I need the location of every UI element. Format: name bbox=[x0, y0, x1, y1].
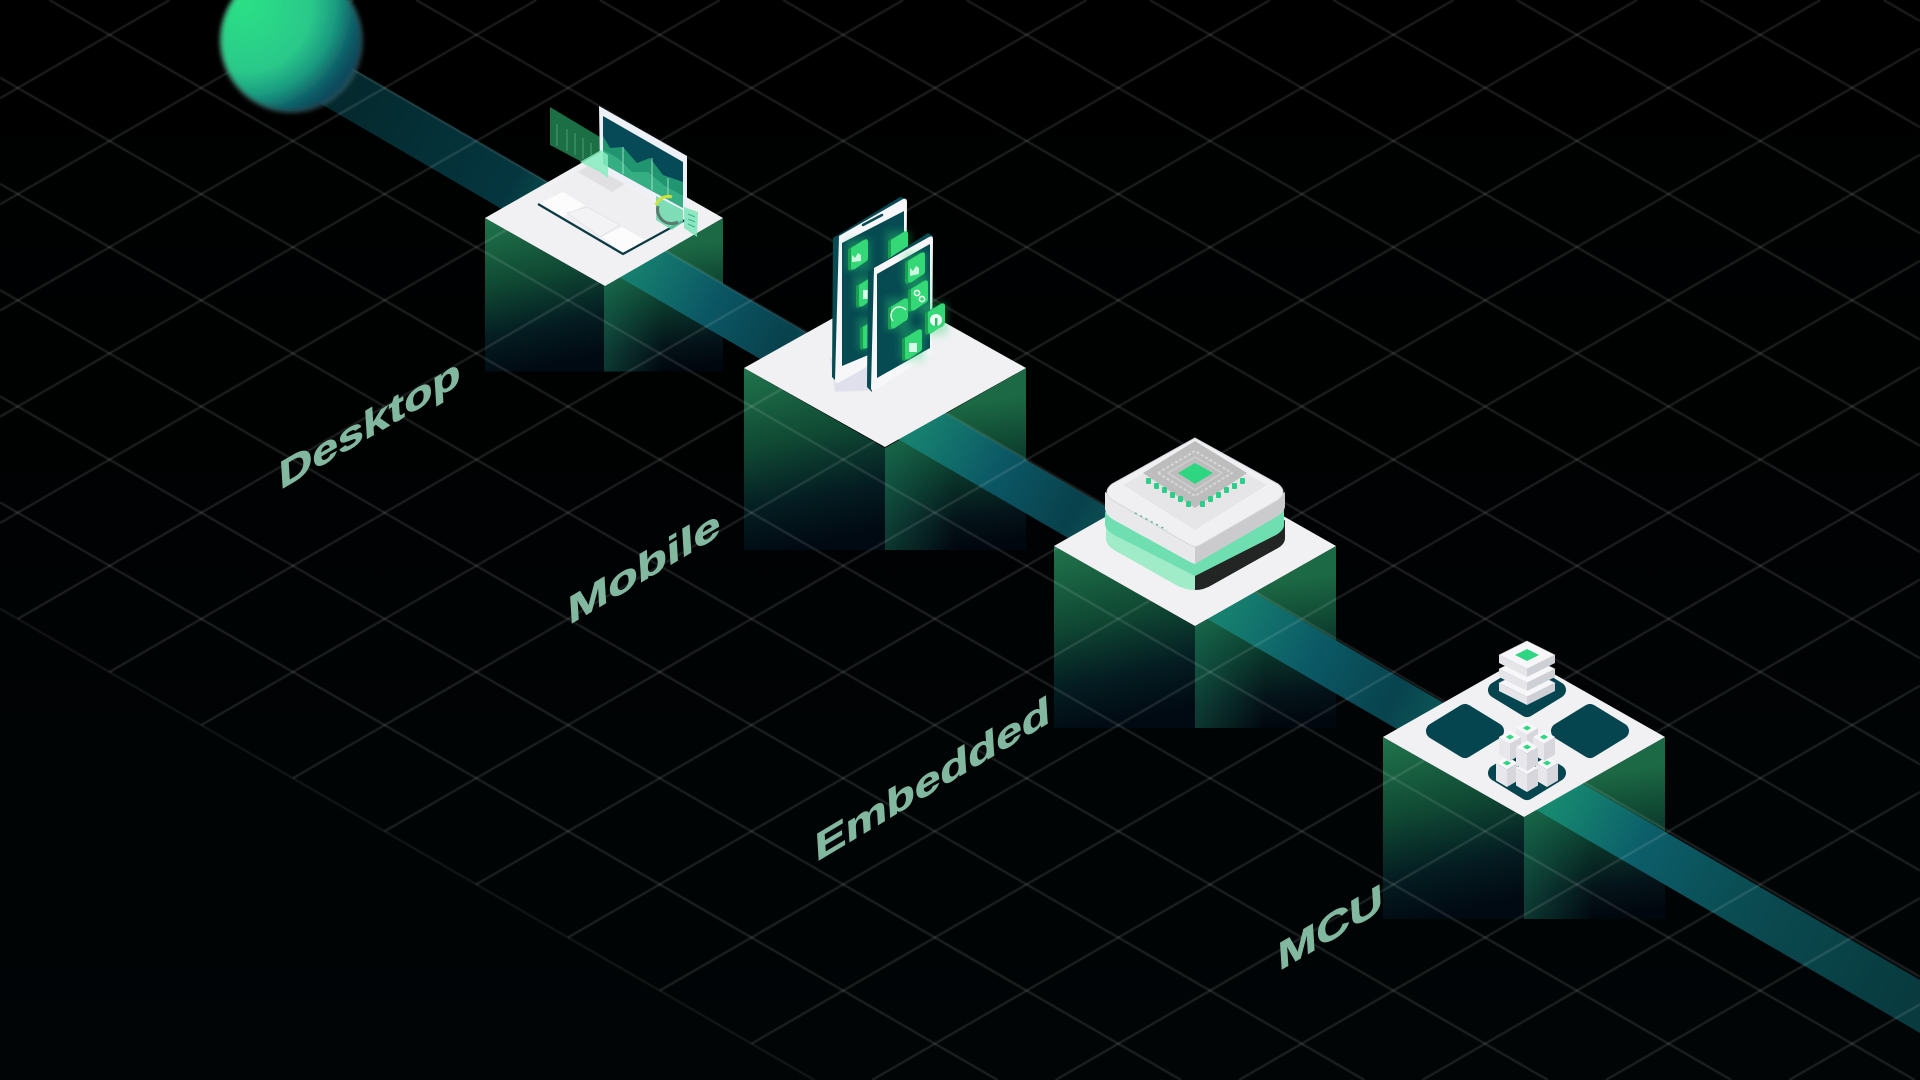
front phone bbox=[867, 233, 947, 392]
platform top bbox=[485, 150, 723, 286]
cube body: Embedded bbox=[1054, 546, 1336, 728]
icon: gauge widget bbox=[656, 196, 698, 237]
icon: chip housing bbox=[1105, 438, 1285, 564]
icon: chip base layers bbox=[1105, 508, 1285, 590]
platform top bbox=[744, 289, 1026, 447]
app icon tiles on back phone bbox=[846, 231, 910, 350]
icon: cube cluster bbox=[1496, 722, 1558, 792]
panel: Embedded platform with chip bbox=[1054, 438, 1336, 626]
label: Desktop: Desktop bbox=[278, 349, 462, 498]
label: Mobile: Mobile bbox=[567, 501, 722, 634]
app icon tiles on front phone bbox=[886, 252, 947, 361]
rounded teal slots bbox=[1434, 671, 1621, 792]
label: Embedded: Embedded bbox=[814, 687, 1051, 870]
panel: Mobile platform with phones bbox=[744, 197, 1026, 447]
sphere bbox=[219, 0, 363, 113]
label: MCU: MCU bbox=[1277, 875, 1384, 979]
panel: Desktop platform with laptop bbox=[485, 106, 723, 286]
panel: MCU platform with blocks bbox=[1383, 641, 1665, 817]
cube body: MCU bbox=[1383, 737, 1665, 919]
cube body: Desktop bbox=[485, 218, 723, 372]
chip pins bbox=[1146, 478, 1245, 507]
platform top bbox=[1383, 657, 1665, 817]
cube body: Mobile bbox=[744, 368, 1026, 550]
back phone bbox=[832, 197, 910, 383]
icon: laptop base bbox=[538, 164, 685, 254]
icon: stacked server plates bbox=[1499, 641, 1555, 705]
icon: back green chart panel bbox=[550, 107, 600, 162]
teal beam running from the sphere to the bottom right bbox=[280, 38, 1920, 1033]
icon: laptop screen with area chart bbox=[580, 106, 687, 215]
phones shadow bbox=[830, 350, 875, 392]
platform top bbox=[1054, 466, 1336, 626]
